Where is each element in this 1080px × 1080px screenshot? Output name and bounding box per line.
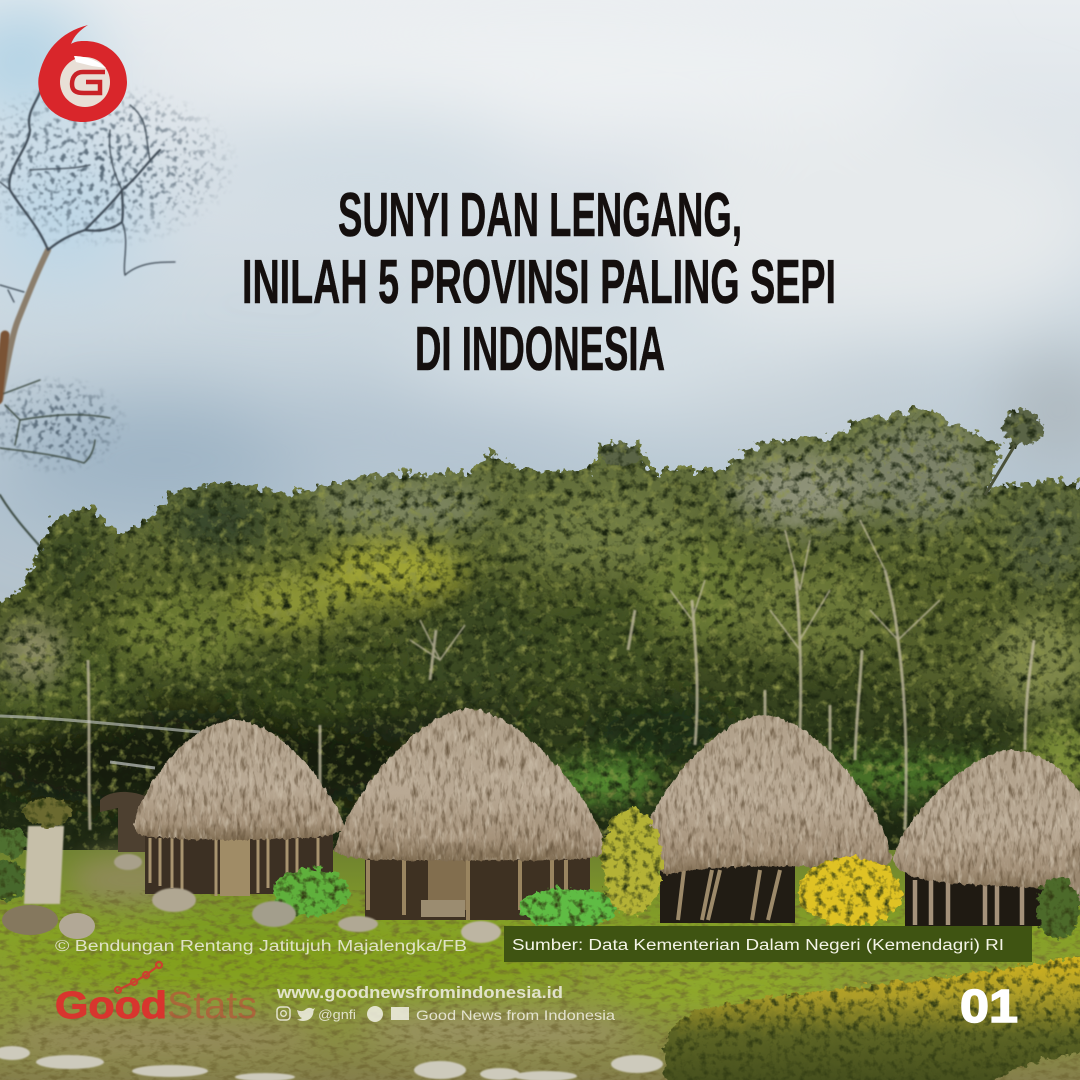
background photo: leafless tree at left [0, 80, 240, 560]
background photo: sky and clouds [0, 0, 1080, 640]
background photo: path stones [0, 1046, 663, 1080]
hut 1 [133, 720, 344, 896]
GoodStats logo: Good [55, 985, 167, 1027]
background photo: garden plants and rocks [114, 808, 1080, 943]
website and social handles [276, 984, 615, 1023]
source box [504, 926, 1032, 962]
website and social handles: Good News from Indonesia [416, 1007, 615, 1023]
GoodStats logo: Stats [167, 985, 257, 1027]
website and social handles: @gnfi [318, 1007, 356, 1022]
hut 3 [640, 715, 892, 923]
title: DI INDONESIA [415, 315, 665, 384]
background photo: lone tree crown and pale trunks [0, 410, 1042, 830]
GoodStats logo [55, 962, 257, 1027]
background photo: forest and hill [0, 405, 1080, 865]
background photo: grass field [0, 850, 1080, 1080]
photo credit: © Bendungan Rentang Jatitujuh Majalengka/FB [55, 938, 467, 955]
background photo: stone statue [2, 798, 95, 939]
background photo: small hut behind [100, 792, 145, 852]
background photo: thatched huts [133, 709, 1080, 926]
background photo: shaded shrubs at left [0, 828, 30, 900]
hut 2 [335, 709, 607, 920]
title [242, 181, 836, 384]
hut 4 [893, 750, 1080, 926]
social icons [277, 1006, 409, 1022]
title: SUNYI DAN LENGANG, [338, 181, 742, 250]
page number: 01 [960, 980, 1018, 1032]
website and social handles: www.goodnewsfromindonesia.id [276, 984, 563, 1002]
background photo: hedge [664, 958, 1080, 1080]
logo: red six emblem [38, 25, 127, 122]
source box: Sumber: Data Kementerian Dalam Negeri (Kemendagri) RI [512, 937, 1004, 954]
